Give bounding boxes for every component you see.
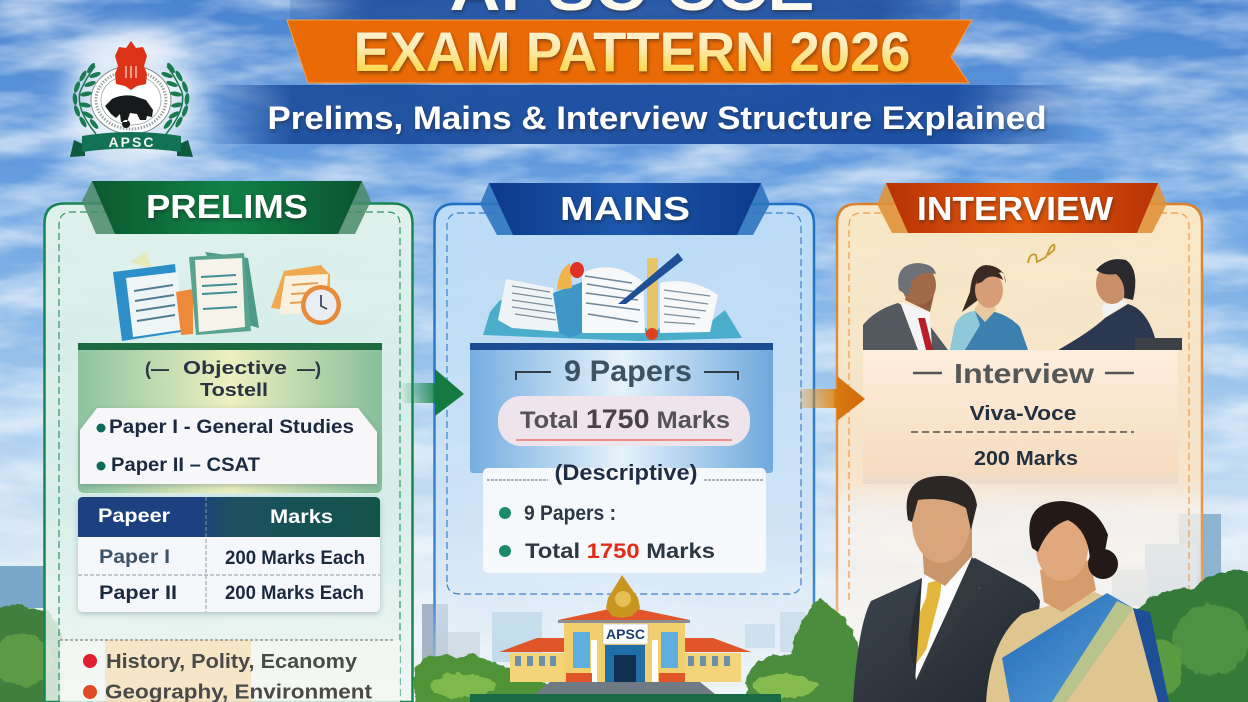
- icon: red crown: [115, 41, 147, 90]
- ribbon: APSC: APSC: [109, 134, 155, 150]
- interview ribbon heading: INTERVIEW: [917, 190, 1114, 227]
- card: descriptive details: Total 1750 Marks: [525, 540, 715, 563]
- illustration: interview panel people: [863, 259, 1182, 350]
- card: objective test: (—: [145, 359, 169, 379]
- card: interview viva-voce: 200 Marks: [974, 448, 1078, 470]
- base bar: [470, 694, 781, 702]
- card: paper list: Paper II – CSAT: [111, 455, 260, 476]
- icon: open book with pen: [483, 253, 742, 341]
- panel: prelims: [44, 181, 412, 702]
- table: paper marks: [78, 497, 380, 612]
- card: interview viva-voce: Interview: [954, 358, 1094, 389]
- pill: total marks: [498, 396, 750, 446]
- sign: APSC: [603, 624, 648, 644]
- card: descriptive details: [483, 460, 766, 573]
- icon: papers and clock: [271, 265, 341, 325]
- table: paper marks: Paper I: [99, 547, 170, 568]
- icon: rhino: [105, 95, 153, 128]
- list: syllabus topics: [83, 651, 372, 702]
- table: paper marks: Papeer: [98, 506, 171, 527]
- card: objective test: Tostell: [200, 380, 268, 400]
- card: objective test: Objective: [183, 358, 287, 378]
- prelims ribbon heading: PRELIMS: [146, 188, 308, 225]
- arrow: mains to interview: [800, 376, 865, 421]
- sign: APSC: APSC: [606, 626, 645, 642]
- card: descriptive details: (Descriptive): [554, 460, 698, 485]
- panel: mains: [434, 183, 814, 702]
- interview ribbon heading: [877, 183, 1167, 233]
- subtitle band: Prelims, Mains & Interview Structure Explained: [268, 100, 1046, 136]
- icon: signature squiggle: [1028, 244, 1054, 263]
- icon: gold emblem: [606, 575, 640, 618]
- card: nine papers: [470, 343, 773, 473]
- icon: study papers: [113, 252, 259, 341]
- title banner: exam pattern 2026: EXAM PATTERN 2026: [354, 20, 910, 83]
- table: paper marks: 200 Marks Each: [225, 548, 365, 569]
- list: syllabus topics: History, Polity, Ecanomy: [106, 651, 358, 673]
- mains ribbon heading: [480, 183, 770, 235]
- card: descriptive details: 9 Papers :: [524, 502, 616, 525]
- card: paper list: Paper I - General Studies: [109, 417, 354, 438]
- illustration: APSC building: [470, 575, 781, 702]
- table: paper marks: Paper II: [99, 583, 177, 604]
- card: paper list: [80, 408, 377, 484]
- panel: interview: [837, 183, 1202, 702]
- illustration: woman in saree: [986, 501, 1169, 702]
- table: paper marks: 200 Marks Each: [225, 583, 364, 604]
- card: interview viva-voce: [863, 350, 1178, 484]
- card: objective test: [78, 343, 382, 493]
- subtitle band: [205, 85, 1085, 144]
- logo: APSC emblem: [70, 41, 193, 157]
- card: nine papers: 9 Papers: [564, 355, 692, 388]
- arrow: prelims to mains: [400, 369, 464, 416]
- prelims ribbon heading: [82, 181, 371, 234]
- mains ribbon heading: MAINS: [560, 190, 690, 227]
- title: APSC CCE: [290, 0, 960, 24]
- background: city skyline: [0, 514, 1221, 664]
- card: objective test: —): [297, 359, 321, 379]
- pill: total marks: Total 1750 Marks: [520, 404, 730, 434]
- card: interview viva-voce: Viva-Voce: [970, 403, 1076, 425]
- table: paper marks: Marks: [270, 507, 333, 528]
- background: middle and right trees: [414, 570, 1248, 702]
- illustration: man in suit: [853, 476, 1040, 702]
- background: left tree: [0, 605, 64, 702]
